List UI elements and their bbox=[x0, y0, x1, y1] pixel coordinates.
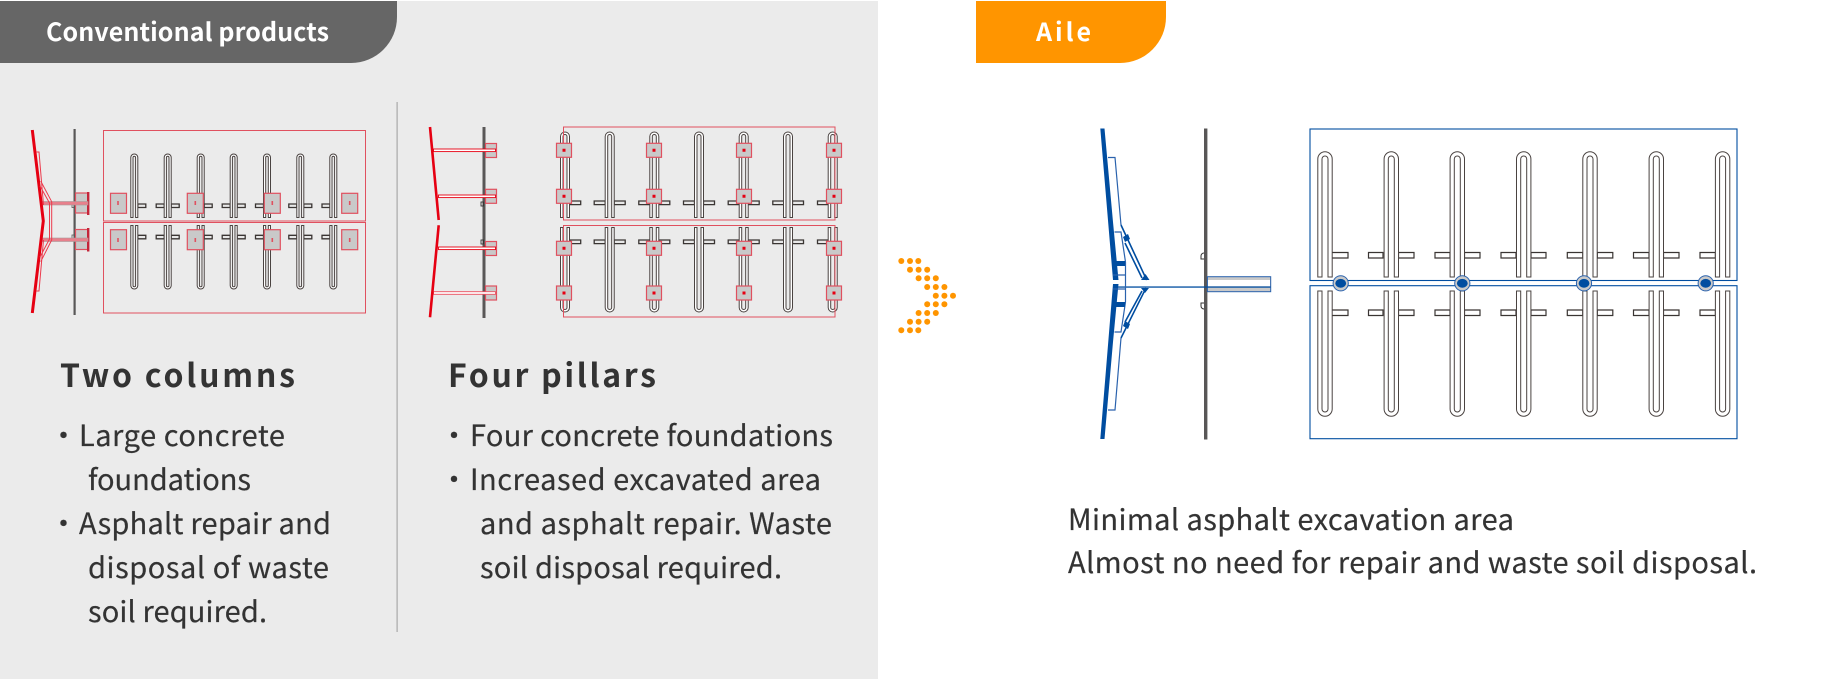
side view: four pillars bbox=[430, 127, 496, 318]
tab: Aile: Aile bbox=[1035, 13, 1091, 49]
list: two columns: disposal of waste bbox=[88, 545, 329, 587]
plan view: four pillars bbox=[556, 127, 842, 317]
text: Aile benefits: Minimal asphalt excavation area bbox=[1068, 497, 1514, 539]
list: four pillars: Increased excavated area bbox=[470, 457, 821, 499]
tab: conventional products: Conventional products bbox=[46, 13, 329, 49]
list: two columns bbox=[49, 413, 331, 631]
tab: Aile bbox=[976, 1, 1166, 63]
list: two columns: ・ bbox=[49, 501, 78, 543]
plan view: Aile bbox=[1310, 129, 1737, 439]
arrow: orange dotted chevron bbox=[898, 258, 956, 333]
list: four pillars: soil disposal required. bbox=[480, 545, 782, 587]
heading: two columns: Two columns bbox=[60, 351, 295, 397]
side view: two columns bbox=[32, 129, 89, 315]
panel: conventional products bbox=[0, 1, 878, 679]
plan view: two columns bbox=[104, 130, 366, 313]
tab: conventional products bbox=[0, 1, 397, 63]
list: two columns: ・ bbox=[49, 413, 78, 455]
list: four pillars bbox=[440, 413, 833, 587]
list: two columns: Asphalt repair and bbox=[79, 501, 331, 543]
list: four pillars: ・ bbox=[440, 413, 469, 455]
list: two columns: foundations bbox=[88, 457, 251, 499]
heading: four pillars: Four pillars bbox=[448, 351, 656, 397]
text: Aile benefits: Almost no need for repair and waste soil disposal. bbox=[1068, 540, 1757, 582]
list: four pillars: and asphalt repair. Waste bbox=[480, 501, 832, 543]
list: four pillars: Four concrete foundations bbox=[470, 413, 833, 455]
text: Aile benefits bbox=[1068, 497, 1757, 582]
list: two columns: Large concrete bbox=[79, 413, 285, 455]
side view: Aile bbox=[1100, 128, 1271, 440]
list: two columns: soil required. bbox=[88, 589, 267, 631]
list: four pillars: ・ bbox=[440, 457, 469, 499]
